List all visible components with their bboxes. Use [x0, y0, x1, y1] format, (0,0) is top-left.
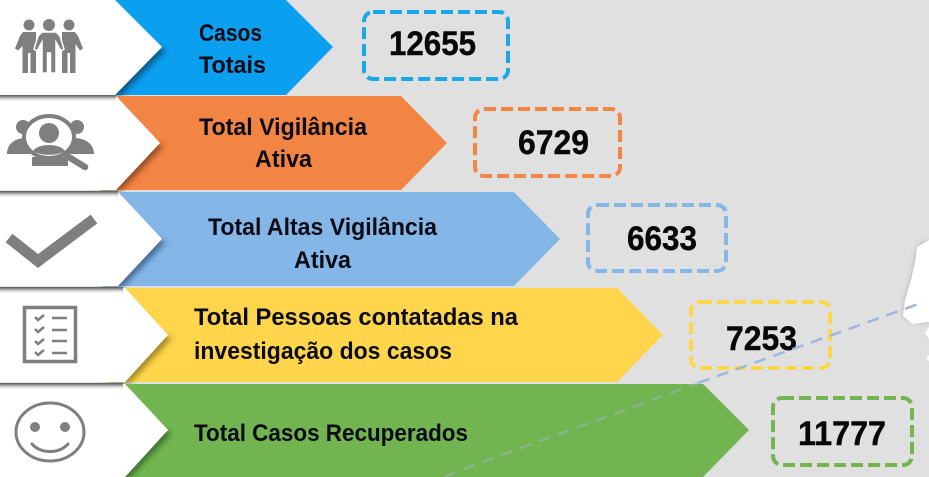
- label: total altas vigilancia ativa: Ativa: [294, 247, 352, 274]
- arrow: yellow: [125, 288, 663, 382]
- map fragment: [903, 240, 929, 361]
- arrow: blue: [115, 0, 333, 95]
- label: casos totais: Totais: [199, 52, 266, 79]
- value box: 7253: [691, 302, 830, 368]
- label: total altas vigilancia ativa: [208, 214, 438, 274]
- value box: 6633: 6633: [627, 220, 697, 258]
- label: total pessoas contatadas: [194, 304, 519, 365]
- value box: 6729: [475, 109, 620, 176]
- arrow: orange: [116, 96, 447, 190]
- white tab: [0, 383, 172, 477]
- panel: casos totais: [0, 0, 333, 97]
- icon: people: [15, 19, 83, 73]
- icon: checklist: [24, 308, 76, 362]
- label: total pessoas contatadas: Total Pessoas contatadas na: [194, 304, 519, 331]
- value box: 12655: 12655: [389, 25, 476, 63]
- label: casos totais: Casos: [199, 20, 262, 47]
- white tab: [0, 0, 166, 97]
- label: total pessoas contatadas: investigação dos casos: [194, 338, 452, 365]
- value box: 6729: 6729: [518, 124, 589, 162]
- arrow: light blue: [118, 192, 560, 286]
- value box: 12655: [364, 12, 508, 79]
- icon: smiley: [16, 403, 84, 461]
- label: casos totais: [199, 20, 266, 79]
- panel: total casos recuperados: [0, 383, 749, 477]
- arrow: green: [125, 384, 749, 477]
- label: total altas vigilancia ativa: Total Altas Vigilância: [208, 214, 438, 241]
- white tab: [0, 191, 166, 288]
- value box: 7253: 7253: [726, 320, 797, 358]
- value box: 6633: [588, 205, 726, 271]
- dashed connector line: [445, 302, 924, 476]
- label: total casos recuperados: Total Casos Recuperados: [194, 420, 468, 447]
- panel: total altas vigilancia ativa: [0, 191, 560, 288]
- white tab: [0, 287, 172, 384]
- panel: total vigilancia ativa: [0, 95, 447, 192]
- label: total vigilancia ativa: Ativa: [255, 146, 313, 173]
- value box: 11777: [773, 398, 912, 465]
- label: total vigilancia ativa: Total Vigilância: [199, 114, 368, 141]
- label: total vigilancia ativa: [199, 114, 368, 173]
- icon: magnifier over people: [7, 116, 94, 167]
- panel: total pessoas contatadas: [0, 287, 663, 384]
- white tab: [0, 95, 164, 192]
- icon: check mark: [9, 219, 94, 261]
- value box: 11777: 11777: [798, 415, 886, 453]
